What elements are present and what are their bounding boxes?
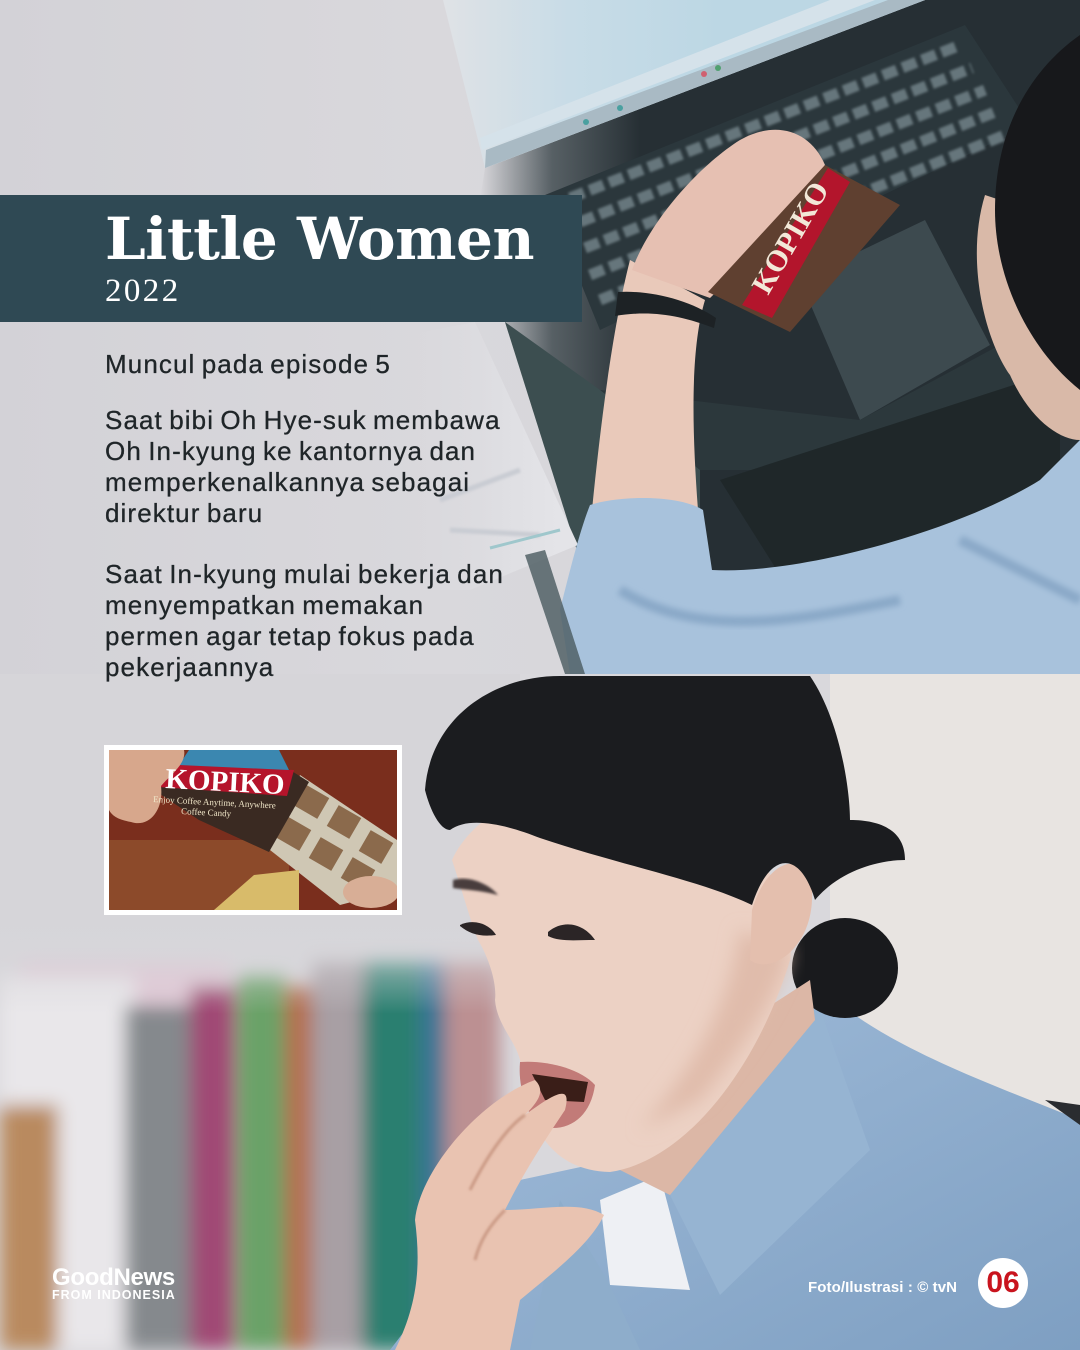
inset photo: Kopiko candy	[104, 745, 402, 915]
photo credit: Foto/Ilustrasi : © tvN	[808, 1279, 957, 1296]
touchpad	[800, 220, 990, 420]
text: episode: Muncul pada episode 5	[105, 349, 391, 379]
shirt	[560, 440, 1080, 674]
eyes	[453, 879, 498, 895]
inset photo: Kopiko candy: KOPIKO	[165, 763, 285, 801]
text: scene one	[105, 405, 501, 528]
hand	[395, 1080, 604, 1350]
text: scene one: Saat bibi Oh Hye-suk membawa	[105, 405, 501, 435]
text: scene one: Oh In-kyung ke kantornya dan	[105, 436, 476, 466]
inset photo: Kopiko candy: Coffee Candy	[181, 806, 232, 819]
text: scene one: memperkenalkannya sebagai	[105, 467, 470, 497]
candy wrapper: KOPIKO	[745, 176, 836, 300]
watch	[615, 292, 716, 328]
candy wrapper	[708, 165, 900, 332]
title: Little Women	[105, 205, 534, 273]
person head	[977, 195, 1080, 440]
text: scene two	[105, 559, 504, 682]
text: scene two: permen agar tetap fokus pada	[105, 621, 475, 651]
text: scene two: Saat In-kyung mulai bekerja dan	[105, 559, 504, 589]
hair bun	[792, 918, 898, 1018]
top photo: desk with laptop	[380, 0, 1080, 674]
text: scene two: pekerjaannya	[105, 652, 274, 682]
logo: GoodNews from Indonesia: FROM INDONESIA	[52, 1288, 176, 1302]
year: 2022	[105, 273, 181, 309]
text: scene one: direktur baru	[105, 498, 263, 528]
keyboard	[545, 166, 617, 330]
text: scene two: menyempatkan memakan	[105, 590, 424, 620]
face	[452, 823, 790, 1172]
hand	[632, 130, 825, 298]
page number: 06	[986, 1266, 1020, 1299]
page number	[978, 1258, 1028, 1308]
neck	[620, 980, 815, 1195]
laptop screen	[443, 0, 925, 168]
logo: GoodNews from Indonesia: GoodNews	[52, 1264, 175, 1291]
title banner	[0, 195, 582, 322]
inset photo: Kopiko candy: Enjoy Coffee Anytime, Anywhere	[153, 794, 276, 810]
ear	[750, 864, 812, 964]
forearm	[592, 260, 705, 510]
mouth	[520, 1062, 595, 1128]
document on desk	[510, 400, 578, 572]
laptop base	[484, 0, 1080, 570]
shirt	[390, 985, 1080, 1350]
bottom photo: woman eating candy	[0, 674, 1080, 1350]
hair	[425, 676, 905, 905]
blurred books	[0, 960, 500, 1350]
